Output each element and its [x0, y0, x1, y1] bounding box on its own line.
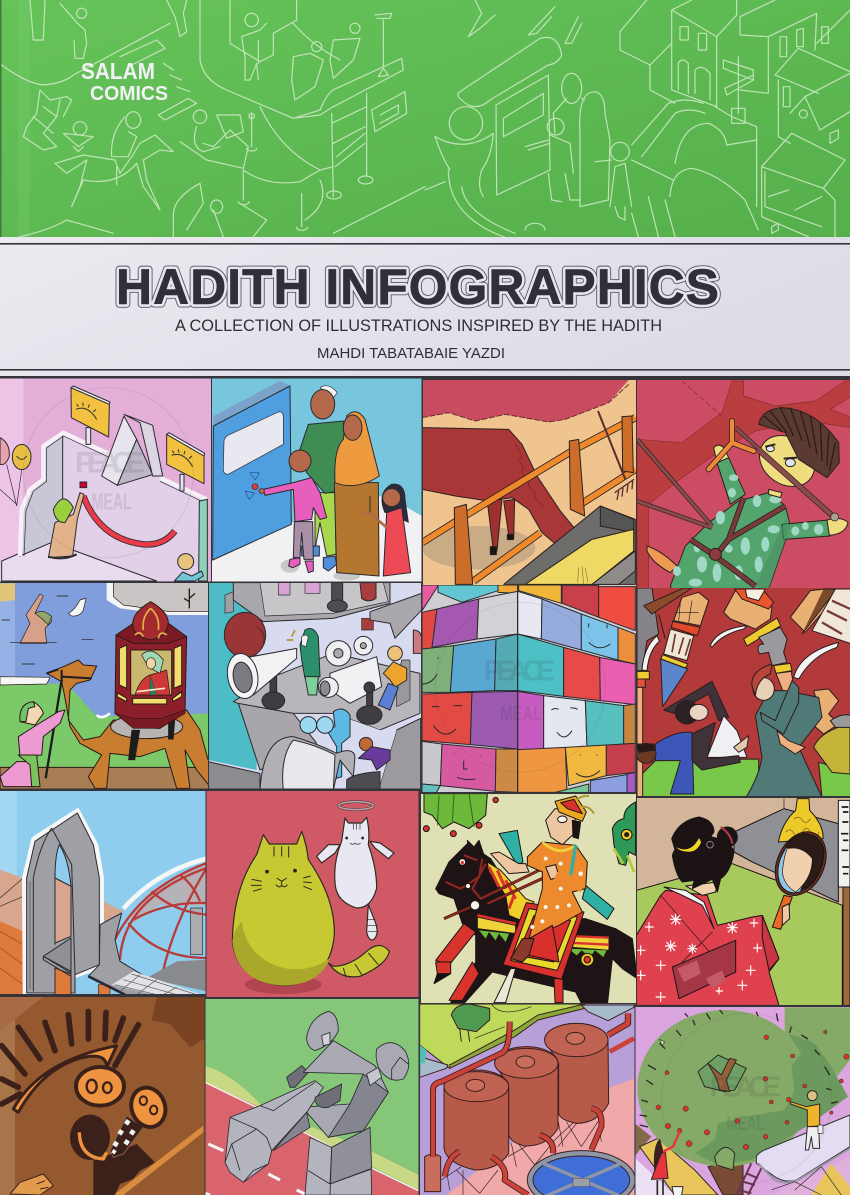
watermark: PEACE [484, 656, 555, 688]
watermark: PEACE [710, 1072, 781, 1104]
panel: grey machines [207, 580, 427, 790]
watermark [712, 1076, 780, 1130]
author: MAHDI TABATABAIE YAZDI [317, 346, 505, 362]
panel: brick wall faces [422, 584, 637, 797]
watermark: MEAL [92, 488, 132, 514]
panel: family at door [210, 376, 425, 586]
panel: yellow and white cats [205, 788, 422, 1001]
panel: grey robot [205, 999, 420, 1195]
panel: camel and howdah [0, 580, 213, 790]
line art: right half [425, 0, 850, 237]
heading: HADITH INFOGRAPHICS [116, 259, 719, 315]
panel: arch and dome [0, 788, 207, 996]
panel: apple tree [635, 1000, 850, 1195]
logo: Salam Comics: COMICS [90, 83, 168, 105]
watermark: MEAL [500, 701, 542, 726]
panel: red tanks [418, 1000, 635, 1195]
panel: brown mask [0, 994, 207, 1195]
panel: horse at trough [422, 376, 637, 589]
panel: figures and falling bricks [635, 584, 850, 797]
watermark: PEACE [75, 447, 145, 480]
heading: HADITH INFOGRAPHICS [116, 259, 719, 315]
watermark: MEAL [726, 1113, 765, 1135]
line art: left half [2, 0, 425, 237]
watermark [77, 452, 144, 510]
watermark [486, 660, 554, 720]
panel: gallery rope [0, 376, 213, 586]
logo: Salam Comics [81, 58, 168, 105]
panel: kimono mirror [636, 792, 850, 1009]
logo: Salam Comics: SALAM [81, 58, 155, 84]
title band [0, 237, 850, 378]
subtitle: A COLLECTION OF ILLUSTRATIONS INSPIRED BY THE HADITH [175, 317, 662, 335]
heading: HADITH INFOGRAPHICS [116, 259, 719, 315]
panel: slingshot character [635, 376, 850, 589]
panel: rider on black horse [419, 792, 637, 1005]
illustration grid [0, 376, 850, 1195]
green header panel with line art [0, 0, 850, 238]
